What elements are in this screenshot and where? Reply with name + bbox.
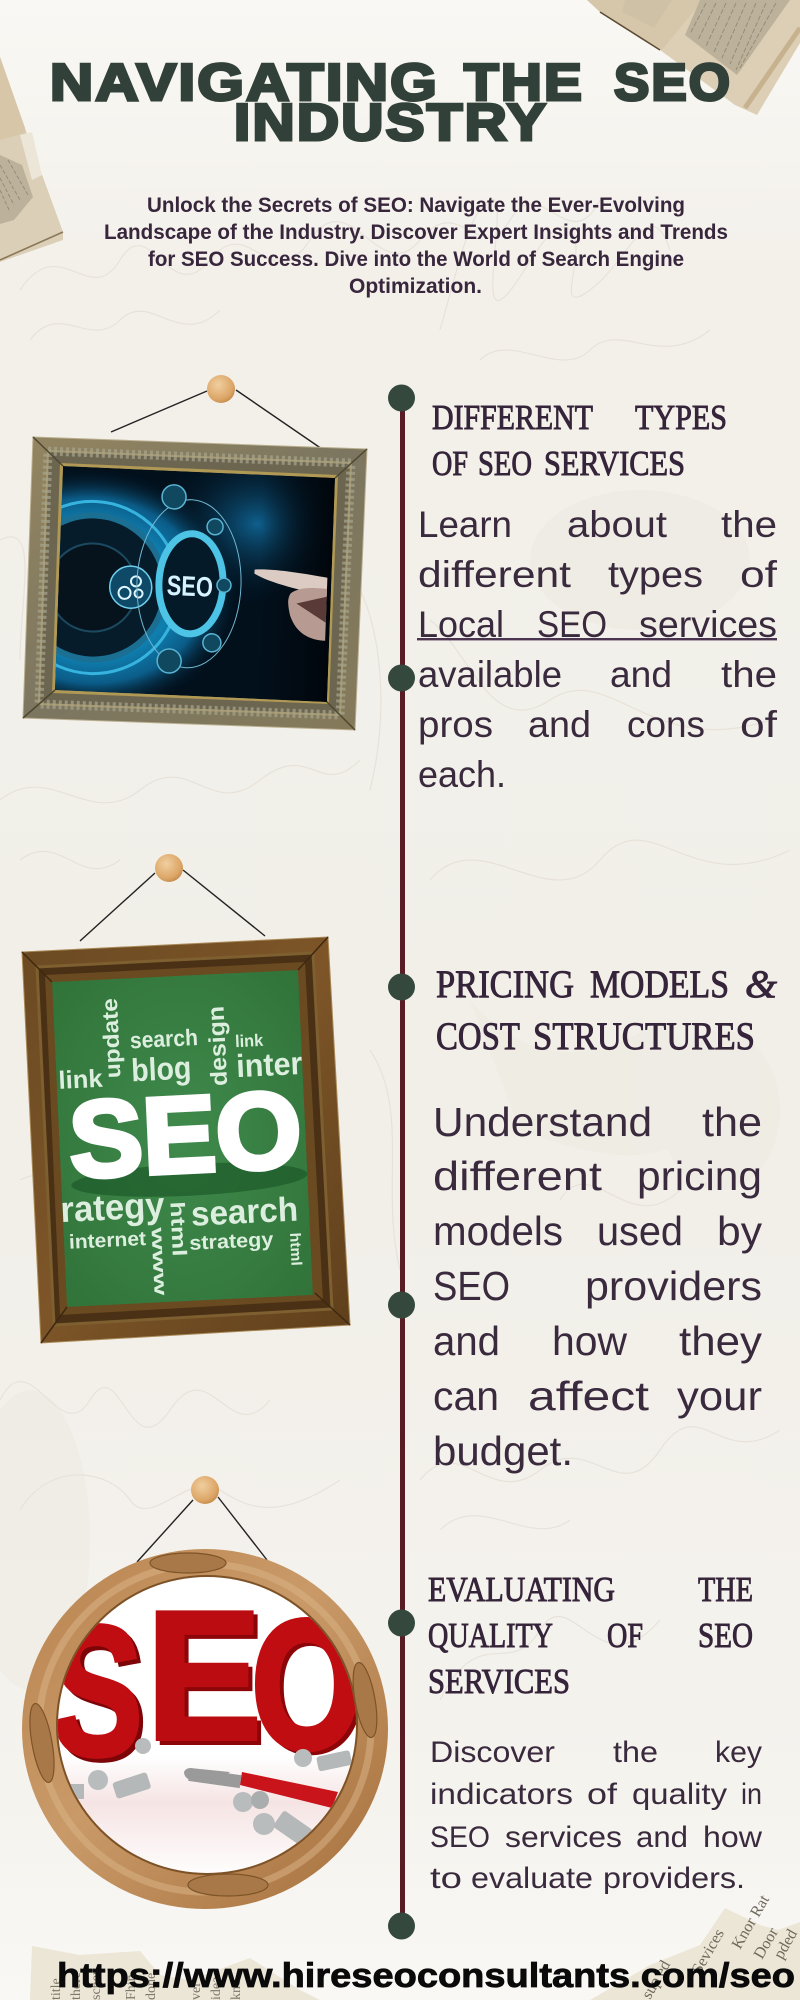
section 1 body text: and [528,704,591,745]
section 3 body text: to [430,1862,462,1895]
section 3 body text: services [505,1821,622,1854]
hanging picture 2: green SEO word board: link [235,1031,264,1051]
section 1 body text: different [418,554,572,595]
section 2 body text: how [552,1318,627,1364]
hanging picture 2: green SEO word board: update [97,998,126,1079]
section 3 body text: in [741,1778,762,1811]
torn paper scrap: bottom right: Door [751,1924,782,1962]
section 2 body text: the [702,1099,762,1145]
hanging picture 2: green SEO word board: rategy [60,1184,165,1230]
section 2 heading: & [745,963,778,1006]
torn paper scrap: bottom right [590,1892,800,2000]
section 3 body text: providers. [603,1862,745,1895]
intro text [104,194,728,298]
section 1 body text: Learn [418,504,512,545]
book corner: top left [0,57,63,262]
section 3 body text: indicators [430,1778,573,1811]
section 3 heading: THE [698,1570,753,1609]
section 1 body text: cons [627,704,705,745]
hanging picture 3: round frame with red SEO letters [22,1476,388,1909]
section 1 heading: OF [432,444,468,483]
section 1 body text: each. [418,754,506,795]
section 1 body text: the [721,654,777,695]
section 2 heading: COST [436,1015,520,1058]
torn paper scrap: bottom right: Sevices [689,1926,728,1977]
section 2 body text: models [433,1208,563,1254]
hanging picture 1: SEO technology [3,375,367,730]
section 2 body text: Understand [433,1099,652,1145]
section 1 body text: services [639,604,777,645]
section 3 body text: of [587,1778,618,1811]
torn paper scrap: bottom left: Fhin [124,1974,139,2000]
section 2 heading: STRUCTURES [533,1015,755,1058]
section 2 body text: they [679,1318,763,1364]
torn paper scrap: bottom left: kno [229,1979,244,2000]
hanging picture 2: green SEO word board: blog [130,1049,192,1088]
hanging picture 2: green SEO word board: search [190,1191,299,1234]
intro text: for SEO Success. Dive into the World of Search Engine [148,248,684,271]
hanging picture 2: green SEO word board: html [165,1201,190,1257]
hanging picture 2: green SEO word board: html [286,1232,305,1266]
torn paper scrap: bottom left: done [144,1973,159,2000]
section 2 body text [433,1099,763,1474]
section 2 body text: by [717,1208,763,1254]
section 2 body text: and [433,1318,500,1364]
section 3 body text: how [703,1821,762,1854]
torn paper scrap: bottom left: title [49,1978,64,2000]
timeline [388,384,415,1940]
section 2 body text: SEO [433,1263,510,1309]
book corner: top right [587,0,800,115]
hanging picture 2: green SEO word board: design [202,1005,232,1087]
section 1 body text: the [721,504,777,545]
section 1 body text: SEO [537,604,607,645]
section 1 body text: and [610,654,672,695]
section 1 heading: DIFFERENT [432,398,593,437]
torn paper scrap: bottom left: there [69,1972,84,2000]
section 3 body text [430,1736,762,1895]
section 2 heading: MODELS [590,963,729,1006]
section 1 body text: types [608,554,703,595]
intro text: Landscape of the Industry. Discover Expert Insights and Trends [104,221,728,244]
section 2 heading [436,963,778,1058]
section 3 body text: quality [632,1778,727,1811]
section 1 heading: SERVICES [544,444,685,483]
section 3 heading: EVALUATING [428,1570,615,1609]
website url: https://www.hireseoconsultants.com/seo [57,1957,795,1995]
big SEO word: SEO [67,1068,304,1200]
section 3 heading: SEO [698,1616,753,1655]
section 1 body text: about [567,504,668,545]
section 1 heading: TYPES [635,398,727,437]
section 2 body text: can [433,1373,499,1419]
section 3 body text: and [636,1821,688,1854]
hanging picture 3: round frame with red SEO letters: S [51,1588,143,1795]
section 3 heading [428,1570,753,1701]
section 2 body text: your [677,1373,762,1419]
section 3 body text: Discover [430,1736,555,1769]
section 3 heading: QUALITY [428,1616,553,1655]
hanging picture 2: green SEO word board: internet [69,1228,147,1254]
hanging picture 2: green SEO word board: link [58,1065,103,1095]
intro text: Unlock the Secrets of SEO: Navigate the Ever-Evolving [147,194,685,217]
section 1 body text: pros [418,704,493,745]
section 1 body text: of [740,554,778,595]
hanging picture 3: round frame with red SEO letters: E [150,1576,266,1782]
section 1 body text [417,504,778,795]
intro text: Optimization. [349,275,482,298]
hanging picture 2: green SEO word board [22,854,350,1343]
section 2 body text: budget. [433,1428,573,1474]
title: NAVIGATING [50,54,439,112]
hanging picture 3: round frame with red SEO letters: S [55,1592,147,1799]
section 2 body text: different [433,1153,603,1199]
hanging picture 1: SEO technology: SEO [166,570,213,603]
section 3 heading: OF [607,1616,643,1655]
torn paper scrap: bottom left: idea [209,1976,224,2000]
title: SEO [614,54,732,112]
torn paper scrap: bottom right: Knor Rat [729,1892,773,1952]
section 1 body text: of [740,704,778,745]
torn paper scrap: bottom left [30,1946,320,2000]
title: THE [464,54,584,112]
hanging picture 2: green SEO word board: strategy [189,1229,275,1255]
hanging picture 2: green SEO word board: www [147,1225,171,1297]
torn paper scrap: bottom left: ver [189,1982,204,2000]
section 3 heading: SERVICES [428,1662,570,1701]
section 3 body text: the [613,1736,658,1769]
hanging picture 2: green SEO word board: inter [235,1045,303,1084]
title: INDUSTRY [234,94,548,152]
section 2 heading: PRICING [436,963,574,1006]
torn paper scrap: bottom left: scher [89,1970,104,2000]
section 1 body text: Local [418,604,504,645]
section 2 body text: affect [528,1373,650,1419]
section 3 body text: key [715,1736,762,1769]
section 3 body text: SEO [430,1821,490,1854]
hanging picture 3: round frame with red SEO letters: O [251,1581,363,1787]
title [50,54,732,152]
section 3 body text: evaluate [471,1862,593,1895]
hanging picture 3: round frame with red SEO letters: E [146,1572,262,1778]
section 2 body text: pricing [637,1153,762,1199]
section 1 body text: available [418,654,562,695]
section 1 heading [432,398,727,483]
hanging picture 2: green SEO word board: search [129,1024,198,1053]
hanging picture 3: round frame with red SEO letters: O [255,1584,367,1790]
section 2 body text: providers [585,1263,762,1309]
section 1 heading: SEO [478,444,532,483]
section 2 body text: used [597,1208,683,1254]
